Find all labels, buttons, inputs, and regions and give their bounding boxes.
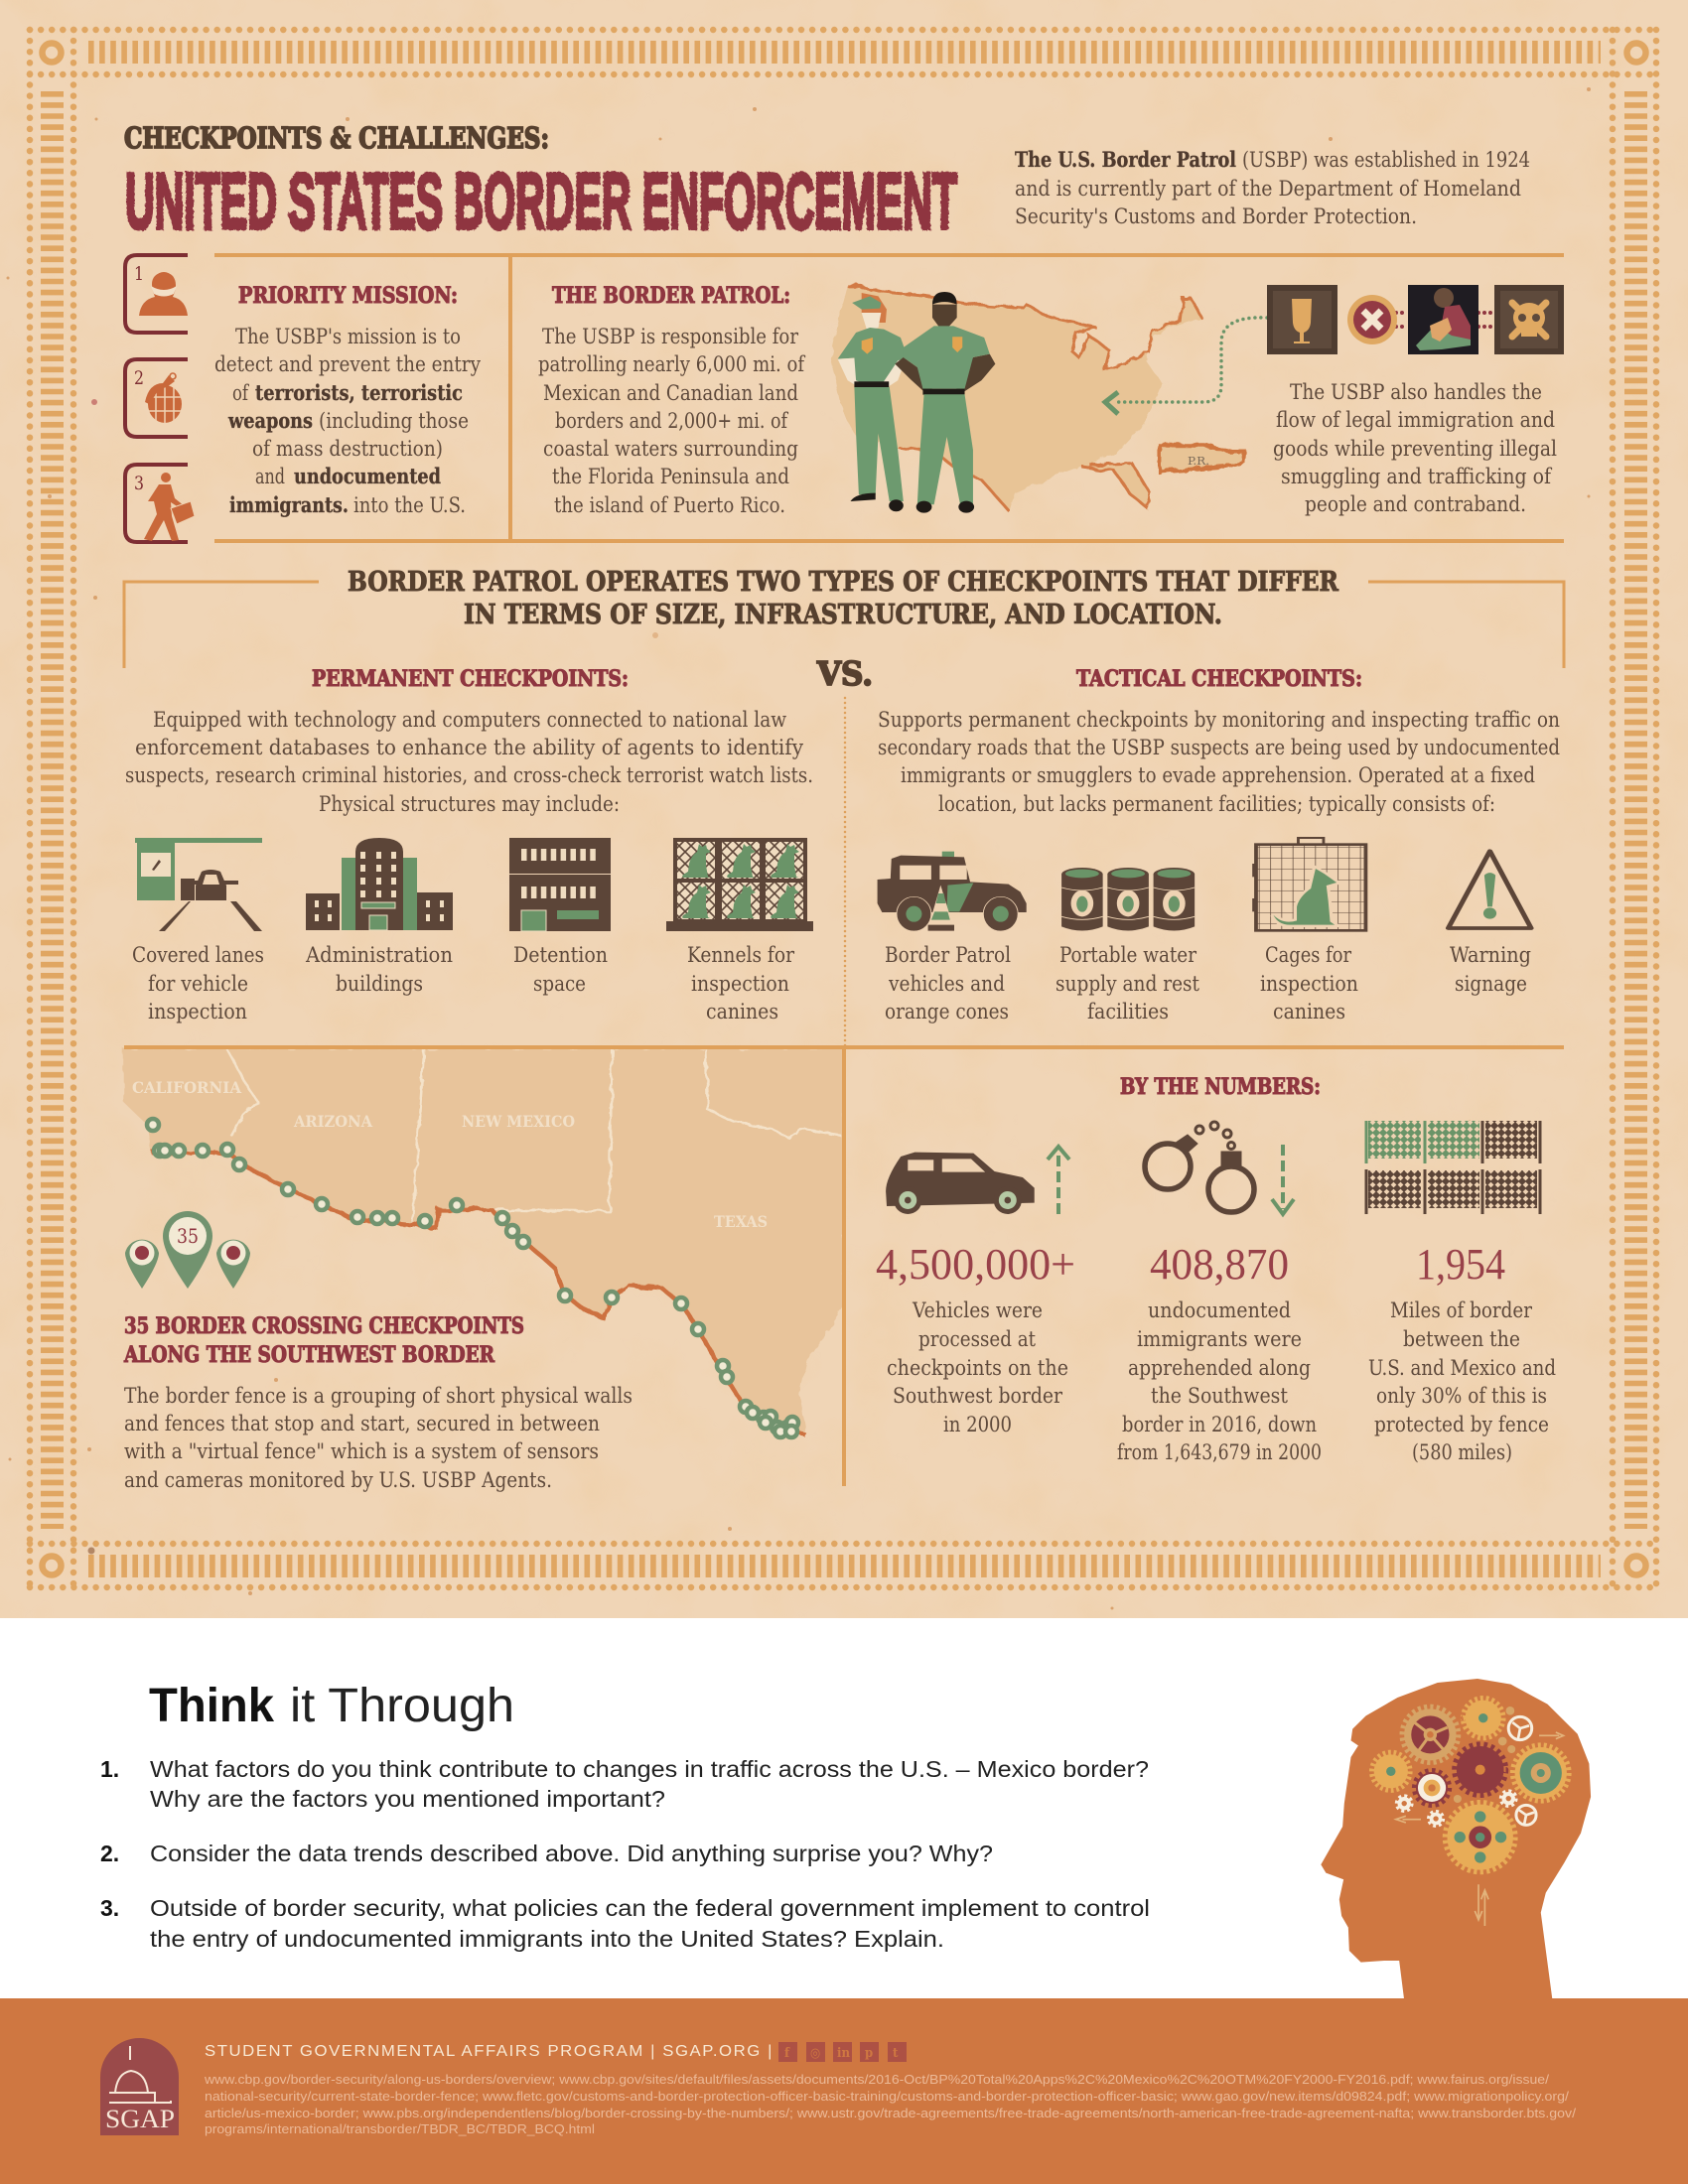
labels: permanent structures: for vehicle xyxy=(148,972,248,997)
labels: tactical structures: Portable water xyxy=(1059,943,1197,968)
stat: apprehensions: from 1,643,679 in 2000 xyxy=(1117,1440,1322,1465)
text block: mission: (including those xyxy=(319,409,469,434)
text block: tactical: location, but lacks permanent facilities; typically consists of: xyxy=(938,792,1495,817)
text block: permanent xyxy=(125,708,813,817)
labels: permanent structures: space xyxy=(533,972,586,997)
text block: patrol: patrolling nearly 6,000 mi. of xyxy=(538,352,806,377)
social icons xyxy=(778,2042,907,2062)
stat: apprehensions: apprehended along xyxy=(1128,1356,1311,1381)
footer band xyxy=(0,1998,1688,2184)
icon: handcuffs xyxy=(1145,1122,1254,1212)
dotted connectors xyxy=(1396,313,1494,327)
stat: vehicles: 4,500,000+ xyxy=(876,1240,1075,1289)
icon: warning sign xyxy=(1448,851,1531,928)
stat: vehicles: Southwest border xyxy=(893,1384,1063,1409)
social icons: t xyxy=(893,2046,899,2061)
text block: legal flow: goods while preventing illegal xyxy=(1273,437,1557,462)
text block: mission: of mass destruction) xyxy=(252,437,443,462)
question 3: 3. xyxy=(100,1895,119,1921)
text block: tactical: Supports permanent checkpoints by monitoring and inspecting traffic on xyxy=(878,708,1560,733)
panel: the border patrol xyxy=(538,283,806,518)
versus label: VS. xyxy=(816,654,873,693)
logo: SGAP xyxy=(100,2038,179,2135)
intro text: Security's Customs and Border Protection. xyxy=(1015,205,1417,229)
labels: tactical structures: Border Patrol xyxy=(885,943,1011,968)
heading: the border patrol: THE BORDER PATROL: xyxy=(552,283,790,309)
text block: permanent: suspects, research criminal histories, and cross-check terrorist watch lists. xyxy=(125,763,813,788)
panel rules: top section xyxy=(214,255,1564,541)
question 2: Consider the data trends described above. Did anything surprise you? Why? xyxy=(150,1841,993,1866)
question 1: Why are the factors you mentioned important? xyxy=(150,1786,665,1812)
icon: kennels xyxy=(666,838,813,931)
social icons: p xyxy=(865,2046,873,2061)
stat: miles of border: between the xyxy=(1403,1327,1520,1352)
heading: checkpoints: ALONG THE SOUTHWEST BORDER xyxy=(123,1342,495,1368)
social icons: f xyxy=(784,2046,790,2061)
dotted arrow xyxy=(1105,318,1267,414)
map label: Puerto Rico: P.R. xyxy=(1188,455,1209,468)
text block: mission: weapons xyxy=(227,409,313,434)
illustration: head with gears xyxy=(1321,1679,1591,2000)
text block: border fence: The border fence is a grouping of short physical walls xyxy=(124,1384,633,1409)
labels: permanent structures: Kennels for xyxy=(687,943,795,968)
stat: vehicles xyxy=(876,1240,1075,1437)
decorative border frame xyxy=(30,30,1658,1588)
text block: border fence xyxy=(124,1384,633,1493)
source references: national-security/current-state-border-fence; www.fletc.gov/customs-and-border-protection-officer-basic-training/customs-and-border-protection-officer-basic; www.gao.gov/new.items/d09824.pdf; www.migrationpolicy.org/ xyxy=(205,2090,1570,2104)
text block: patrol: borders and 2,000+ mi. of xyxy=(555,409,789,434)
text block: legal flow: flow of legal immigration and xyxy=(1276,408,1555,433)
text block: legal flow: The USBP also handles the xyxy=(1290,380,1542,405)
icon: patrol vehicle and cone xyxy=(878,852,1027,931)
heading: think it through: it Through xyxy=(290,1680,514,1732)
text block: mission: of xyxy=(232,381,250,406)
text block: tactical xyxy=(878,708,1560,817)
text block: patrol: Mexican and Canadian land xyxy=(543,381,798,406)
labels: permanent structures: Covered lanes xyxy=(132,943,264,968)
illustration: male officer xyxy=(895,292,995,513)
icon: migrant badge xyxy=(125,465,195,542)
text block: permanent: Equipped with technology and computers connected to national law xyxy=(153,708,787,733)
labels: tactical structures: canines xyxy=(1273,1000,1345,1024)
text block: border fence: and cameras monitored by U.S. USBP Agents. xyxy=(124,1468,552,1493)
icon: administration building xyxy=(306,838,453,930)
text block: tactical: immigrants or smugglers to evade apprehension. Operated at a fixed xyxy=(901,763,1535,788)
stat: miles of border: 1,954 xyxy=(1416,1240,1505,1289)
question 1 xyxy=(100,1756,1149,1812)
text block: patrol: The USBP is responsible for xyxy=(542,325,799,349)
rule above map and numbers xyxy=(124,1045,1564,1049)
stat: miles of border: Miles of border xyxy=(1390,1298,1533,1323)
question 2: 2. xyxy=(100,1841,119,1866)
text block: permanent: enforcement databases to enhance the ability of agents to identify xyxy=(135,736,803,760)
section bracket xyxy=(124,582,1564,668)
map column divider xyxy=(842,1049,846,1486)
map labels: NEW MEXICO xyxy=(462,1112,575,1131)
social icons: in xyxy=(837,2046,850,2061)
heading: priority mission: PRIORITY MISSION: xyxy=(238,283,458,309)
aged paper panel xyxy=(0,0,1688,1618)
text block: patrol: the Florida Peninsula and xyxy=(552,465,789,489)
map labels: TEXAS xyxy=(714,1212,768,1231)
arrow: up xyxy=(1048,1147,1069,1214)
heading: tactical: TACTICAL CHECKPOINTS: xyxy=(1076,666,1362,692)
panel: priority mission xyxy=(214,283,481,518)
stat: apprehensions: immigrants were xyxy=(1137,1327,1302,1352)
labels: tactical structures: vehicles and xyxy=(888,972,1005,997)
intro text: (USBP) was established in 1924 xyxy=(1242,148,1530,173)
text block: legal flow: smuggling and trafficking of xyxy=(1281,465,1553,489)
labels: tactical structures xyxy=(885,943,1531,1024)
section heading: IN TERMS OF SIZE, INFRASTRUCTURE, AND LOCATION. xyxy=(464,599,1222,630)
labels: tactical structures: signage xyxy=(1455,972,1527,997)
text block: tactical: secondary roads that the USBP suspects are being used by undocumented xyxy=(878,736,1560,760)
heading: think it through xyxy=(149,1680,514,1732)
text block: mission: and xyxy=(255,465,285,489)
logo: SGAP: SGAP xyxy=(105,2105,175,2133)
heading: by the numbers: BY THE NUMBERS: xyxy=(1120,1074,1321,1100)
stat: miles of border xyxy=(1368,1240,1556,1465)
panel: by the numbers xyxy=(876,1074,1556,1465)
labels: permanent structures: buildings xyxy=(336,972,423,997)
source references: programs/international/transborder/TBDR_BC/TBDR_BCQ.html xyxy=(205,2122,595,2136)
dotted divider xyxy=(844,698,846,1047)
icon: grenade badge xyxy=(125,359,188,437)
heading: checkpoints: 35 BORDER CROSSING CHECKPOINTS xyxy=(124,1313,524,1339)
illustration: female officer xyxy=(838,293,908,511)
stat: apprehensions xyxy=(1117,1240,1322,1465)
panel: think it through xyxy=(100,1680,1150,1952)
labels: permanent structures: canines xyxy=(706,1000,778,1024)
heading: permanent: PERMANENT CHECKPOINTS: xyxy=(312,666,629,692)
icon: dog cage xyxy=(1252,838,1365,930)
text block: mission: immigrants. xyxy=(229,493,349,518)
icon: skull xyxy=(1494,285,1564,354)
icon: contraband glass xyxy=(1267,285,1337,354)
stat: vehicles: checkpoints on the xyxy=(887,1356,1068,1381)
icon: detention space xyxy=(509,838,611,931)
heading: think it through: Think xyxy=(149,1680,274,1732)
social icons: ◎ xyxy=(810,2046,820,2061)
text block: patrol xyxy=(538,325,806,518)
icon: prohibited X xyxy=(1347,295,1397,344)
map labels xyxy=(132,1078,768,1231)
labels: tactical structures: Warning xyxy=(1450,943,1531,968)
question 3: Outside of border security, what policies can the federal government implement to control xyxy=(150,1895,1150,1921)
stat: miles of border: (580 miles) xyxy=(1412,1440,1512,1465)
intro text xyxy=(1015,148,1530,229)
text block: patrol: the island of Puerto Rico. xyxy=(554,493,785,518)
text block: patrol: coastal waters surrounding xyxy=(543,437,798,462)
icon: grenade badge: 2 xyxy=(134,367,144,389)
icon: migrant badge: 3 xyxy=(134,473,144,494)
labels: permanent structures: Detention xyxy=(513,943,608,968)
icon: location pins xyxy=(125,1211,250,1289)
map: southwest border xyxy=(123,1049,844,1436)
labels: permanent structures: inspection xyxy=(148,1000,247,1024)
icon: terrorist badge xyxy=(125,255,188,333)
stat: apprehensions: the Southwest xyxy=(1151,1384,1288,1409)
stat: miles of border: U.S. and Mexico and xyxy=(1368,1356,1556,1381)
kicker heading: CHECKPOINTS & CHALLENGES: xyxy=(124,121,549,155)
footer organisation line: STUDENT GOVERNMENTAL AFFAIRS PROGRAM | SGAP.ORG | xyxy=(205,2043,774,2060)
labels: tactical structures: Cages for xyxy=(1265,943,1352,968)
labels: tactical structures: orange cones xyxy=(885,1000,1009,1024)
icon: covered lanes xyxy=(135,838,262,931)
stat: miles of border: only 30% of this is xyxy=(1376,1384,1547,1409)
intro text: The U.S. Border Patrol xyxy=(1015,148,1236,173)
stat: vehicles: in 2000 xyxy=(943,1413,1012,1437)
question 1: What factors do you think contribute to changes in traffic across the U.S. – Mexico border? xyxy=(150,1756,1149,1782)
text block: mission: detect and prevent the entry xyxy=(214,352,481,377)
panel: permanent checkpoints xyxy=(125,666,813,1024)
section heading xyxy=(348,566,1338,630)
text block: legal flow xyxy=(1273,380,1557,517)
text block: mission: terrorists, terroristic xyxy=(255,381,463,406)
labels: permanent structures: Administration xyxy=(305,943,453,968)
labels: tactical structures: facilities xyxy=(1087,1000,1169,1024)
labels: permanent structures: inspection xyxy=(691,972,789,997)
heading: checkpoints xyxy=(123,1313,524,1368)
section heading: BORDER PATROL OPERATES TWO TYPES OF CHECKPOINTS THAT DIFFER xyxy=(348,566,1338,598)
checkpoint markers xyxy=(147,1119,798,1437)
source references xyxy=(204,2073,1577,2136)
stat: apprehensions: undocumented xyxy=(1148,1298,1291,1323)
map: United States xyxy=(831,286,1244,511)
text block: permanent: Physical structures may include: xyxy=(319,792,620,817)
question 3: the entry of undocumented immigrants into the United States? Explain. xyxy=(150,1926,944,1952)
text block: mission: undocumented xyxy=(294,465,441,489)
panel: tactical checkpoints xyxy=(878,666,1560,1024)
icon: water barrels xyxy=(1061,868,1195,930)
icon: terrorist badge: 1 xyxy=(134,263,144,285)
question 1: 1. xyxy=(100,1756,119,1782)
text block: border fence: and fences that stop and start, secured in between xyxy=(124,1412,600,1436)
text block: legal flow: people and contraband. xyxy=(1305,492,1526,517)
text block: mission: into the U.S. xyxy=(353,493,466,518)
text block: border fence: with a "virtual fence" which is a system of sensors xyxy=(124,1439,599,1464)
icon: trafficked person xyxy=(1408,285,1478,354)
icon: location pins: 35 xyxy=(177,1224,199,1248)
stat: apprehensions: 408,870 xyxy=(1150,1240,1289,1289)
question 3 xyxy=(100,1895,1150,1952)
map labels: ARIZONA xyxy=(293,1112,373,1131)
source references: www.cbp.gov/border-security/along-us-borders/overview; www.cbp.gov/sites/default/files/assets/documents/2016-Oct/BP%20Total%20Apps%2C%20Mexico%2C%20OTM%20FY2000-FY2016.pdf; www.fairus.org/issue/ xyxy=(204,2073,1550,2087)
stat: vehicles: Vehicles were xyxy=(912,1298,1043,1323)
intro text: and is currently part of the Department of Homeland xyxy=(1015,177,1521,202)
icon: fence xyxy=(1366,1121,1540,1214)
stat: vehicles: processed at xyxy=(918,1327,1036,1352)
stat: miles of border: protected by fence xyxy=(1374,1413,1549,1437)
icon: car xyxy=(886,1153,1035,1214)
text block: mission xyxy=(214,325,481,518)
labels: permanent structures xyxy=(132,943,795,1024)
map labels: CALIFORNIA xyxy=(132,1078,242,1097)
arrow: down xyxy=(1272,1145,1294,1214)
source references: article/us-mexico-border; www.pbs.org/independentlens/blog/border-crossing-by-the-numbers/; www.ustr.gov/trade-agreements/free-trade-agreements/north-american-free-trade-agreement-nafta; www.transborder.bts.gov/ xyxy=(205,2107,1577,2120)
stat: apprehensions: border in 2016, down xyxy=(1122,1413,1317,1437)
text block: mission: The USBP's mission is to xyxy=(235,325,461,349)
labels: tactical structures: supply and rest xyxy=(1055,972,1199,997)
labels: tactical structures: inspection xyxy=(1260,972,1358,997)
